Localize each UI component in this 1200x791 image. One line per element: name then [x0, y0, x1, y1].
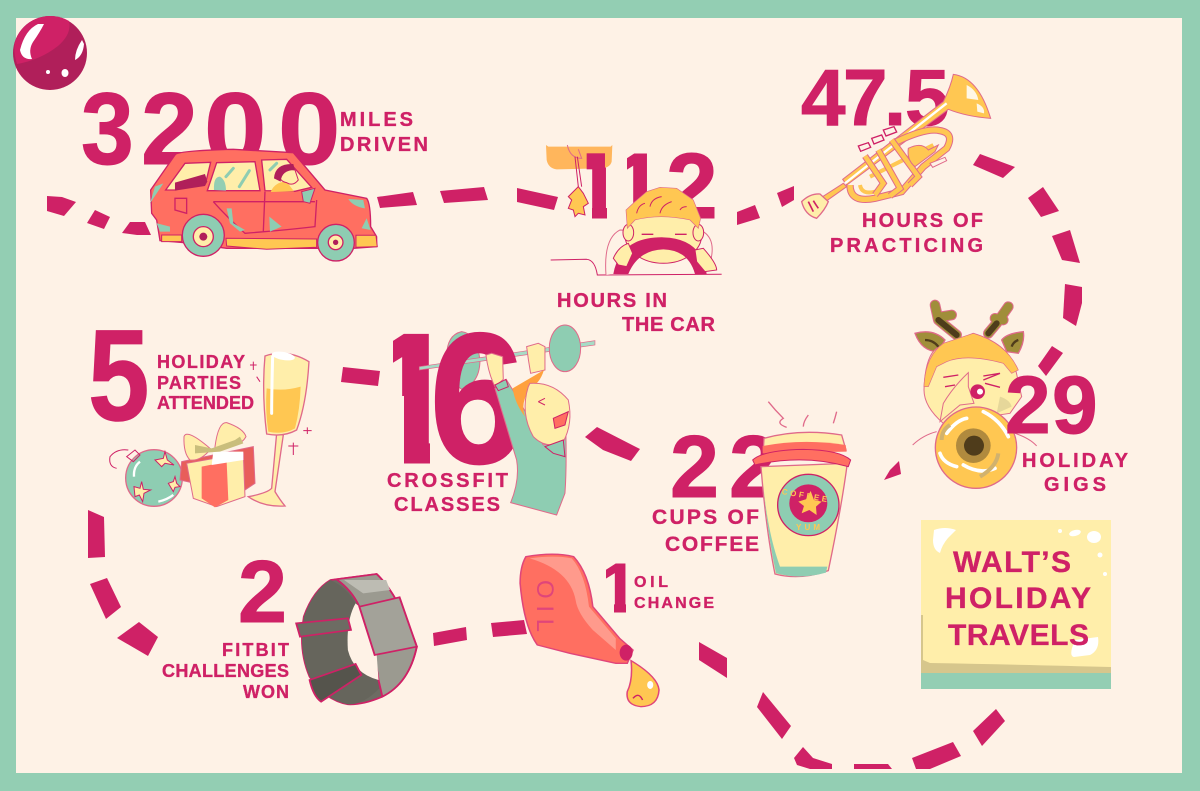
- panel: title card: [921, 520, 1111, 689]
- stat: 29 holiday gigs: HOLIDAY: [1022, 450, 1129, 472]
- stat: 5 holiday parties attended: 5: [88, 303, 149, 448]
- stat: 3200 miles driven: 0: [204, 72, 266, 186]
- stat: 112 hours in the car: THE CAR: [622, 314, 716, 336]
- title text: WALT’S: [953, 546, 1071, 579]
- stat: 22 cups of coffee: [652, 417, 778, 556]
- icon: person lifting barbell: [486, 343, 570, 515]
- stat: 112 hours in the car: 1: [571, 134, 623, 238]
- title text: [945, 546, 1091, 652]
- stat: 5 holiday parties attended: [88, 303, 254, 448]
- icon: reindeer blowing trumpet: [913, 305, 1037, 488]
- stat: 1 oil change: [606, 564, 714, 612]
- icon: red car: [150, 149, 377, 261]
- stat: 47.5 hours of practicing: 47.5: [801, 53, 950, 142]
- stat: 3200 miles driven: [81, 72, 428, 186]
- stat: 112 hours in the car: 2: [666, 134, 718, 238]
- label on coffee cup: COFFEE: [781, 487, 829, 504]
- stat: 22 cups of coffee: 22: [670, 417, 778, 516]
- icon: coffee cup: [753, 402, 851, 577]
- stat: 2 fitbit challenges won: FITBIT: [222, 640, 289, 660]
- stat: 47.5 hours of practicing: HOURS OF: [862, 210, 983, 232]
- stat: 1 oil change: OIL: [634, 574, 668, 591]
- title text: TRAVELS: [948, 619, 1089, 652]
- stat: 1 oil change: CHANGE: [634, 595, 714, 612]
- stat: 3200 miles driven: MILES: [340, 109, 413, 131]
- stat: 1 oil change: 1: [599, 549, 638, 627]
- digit 6 of 16: 6: [429, 295, 526, 503]
- stat: 16 crossfit classes: CLASSES: [394, 494, 500, 516]
- stat: 29 holiday gigs: 9: [1052, 360, 1098, 451]
- stat: 29 holiday gigs: GIGS: [1044, 474, 1106, 496]
- stat: 29 holiday gigs: 2: [1005, 360, 1051, 451]
- dashed road: [47, 154, 1082, 769]
- stat: 112 hours in the car: [558, 152, 715, 332]
- icon: barbell: [419, 325, 595, 389]
- icon: oil bottle pouring: [520, 554, 659, 707]
- stat: 112 hours in the car: HOURS IN: [557, 290, 667, 312]
- stat: 16 crossfit classes: 1: [359, 294, 463, 503]
- stat: 5 holiday parties attended: ATTENDED: [157, 393, 254, 413]
- stat: 5 holiday parties attended: HOLIDAY: [157, 352, 245, 372]
- stat: 47.5 hours of practicing: [801, 53, 983, 257]
- stat: 3200 miles driven: 0: [278, 72, 340, 186]
- title text: HOLIDAY: [945, 582, 1091, 615]
- label on coffee cup: YUM: [796, 523, 820, 532]
- stat: 29 holiday gigs: [1005, 360, 1129, 496]
- stat: 2 fitbit challenges won: [162, 542, 289, 702]
- oil bottle lettering: OIL: [531, 580, 558, 632]
- icon: trumpet: [802, 74, 991, 218]
- icon: shiny ornament ball: [13, 16, 87, 90]
- stat: 2 fitbit challenges won: WON: [243, 682, 289, 702]
- stat: 47.5 hours of practicing: PRACTICING: [830, 235, 983, 257]
- label on coffee cup: [781, 487, 829, 532]
- stat: 3200 miles driven: 3: [81, 72, 134, 186]
- stat: 3200 miles driven: DRIVEN: [340, 134, 428, 156]
- stat: 22 cups of coffee: CUPS OF: [652, 506, 759, 529]
- stat: 16 crossfit classes: [388, 334, 508, 512]
- icon: driver at the steering wheel: [546, 145, 722, 275]
- icon: fitbit wristband: [296, 574, 417, 704]
- stat: 22 cups of coffee: COFFEE: [665, 533, 759, 556]
- stat: 5 holiday parties attended: PARTIES: [157, 373, 241, 393]
- stat: 16 crossfit classes: CROSSFIT: [387, 470, 508, 492]
- icon: champagne flute, gift and bauble: [110, 350, 312, 507]
- stat: 2 fitbit challenges won: CHALLENGES: [162, 661, 289, 681]
- stat: 112 hours in the car: 1: [612, 134, 664, 238]
- stat: 3200 miles driven: 2: [141, 72, 198, 186]
- stat: 2 fitbit challenges won: 2: [238, 542, 287, 641]
